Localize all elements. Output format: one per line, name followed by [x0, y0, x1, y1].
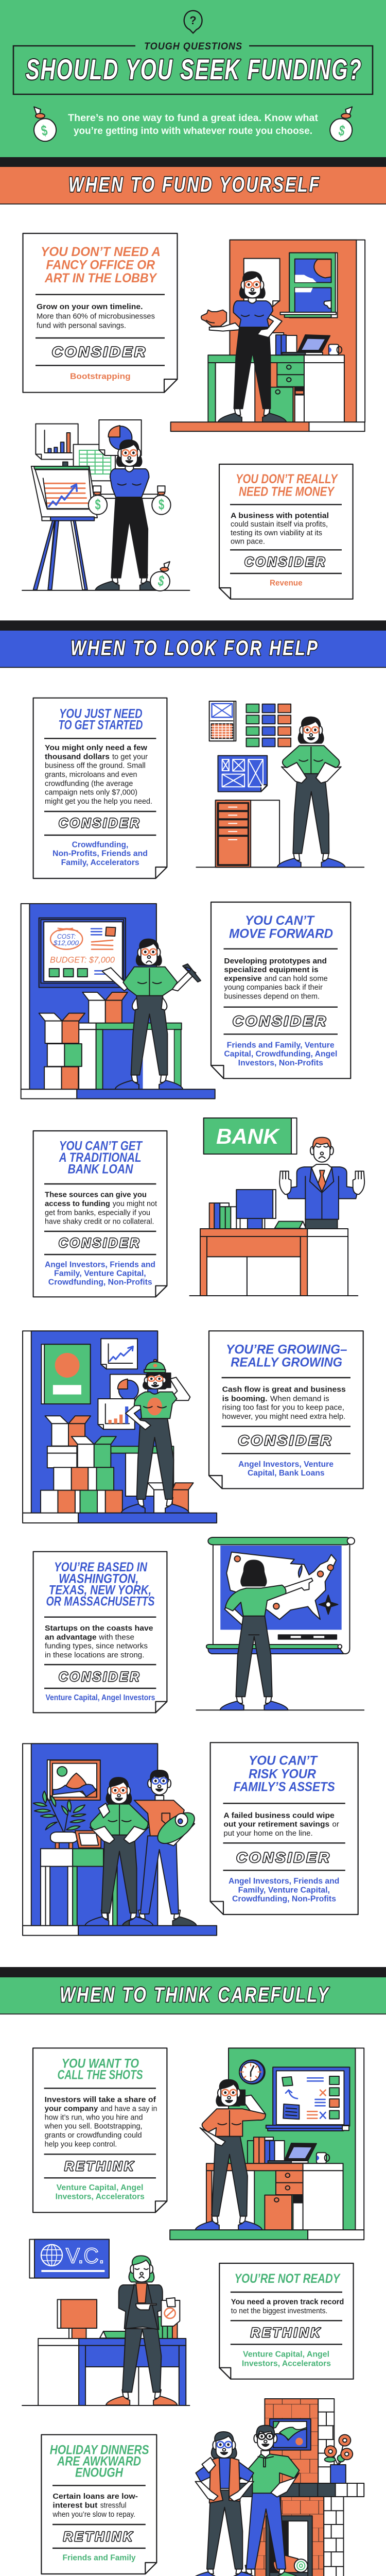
funding sources	[56, 2183, 145, 2201]
V.C. sign	[29, 2240, 109, 2278]
card body text: how it’s run, who you hire and	[45, 2113, 143, 2122]
card heading	[59, 1139, 143, 1176]
card heading	[50, 2443, 149, 2480]
funding sources: Family, Venture Capital,	[238, 1886, 330, 1894]
illustration: woman with charts and money bags: $	[95, 497, 101, 513]
icon: question speech bubble: ?	[189, 14, 197, 27]
filing cabinet	[216, 800, 279, 867]
card body text: expensive	[224, 975, 262, 983]
card body text: specialized equipment is	[224, 966, 319, 974]
icon: money bag left	[34, 107, 56, 141]
stacked boxes	[39, 992, 128, 1089]
table	[79, 1023, 182, 1089]
rethink label: RETHINK	[63, 2530, 134, 2544]
funding sources: Angel Investors, Venture	[238, 1460, 334, 1469]
illustration: woman with blueprints and cabinet	[196, 701, 364, 867]
funding sources: Capital, Bank Loans	[248, 1469, 325, 1478]
card heading	[234, 1754, 335, 1794]
card body text: young companies back if their	[224, 984, 323, 992]
card heading: NEED THE MONEY	[239, 484, 335, 499]
funding sources: Capital, Crowdfunding, Angel	[224, 1050, 337, 1059]
card: you can't move forward	[211, 902, 350, 1078]
card body text: thousand dollars	[45, 753, 110, 761]
funding sources: Angel Investors, Friends and	[229, 1877, 339, 1886]
funding source: Bootstrapping	[70, 372, 131, 381]
funding sources: Angel Investors, Friends and	[45, 1260, 155, 1269]
card body text: business off the ground. Small	[45, 762, 146, 770]
card heading: YOU CAN’T GET	[59, 1139, 143, 1154]
woman with hard hat	[121, 1360, 190, 1513]
card body text: own pace.	[231, 538, 265, 546]
table and boxes	[41, 1416, 194, 1513]
card body text: businesses depend on them.	[224, 992, 320, 1001]
plant and table	[33, 1791, 117, 1926]
card heading	[229, 913, 333, 941]
section banner: when to fund yourself: WHEN TO FUND YOURSELF	[68, 173, 321, 196]
banker	[279, 1138, 364, 1229]
kicker: tough questions: TOUGH QUESTIONS	[144, 41, 242, 52]
funding sources: Non-Profits, Friends and	[52, 850, 148, 858]
card body text	[37, 303, 155, 330]
woman	[102, 939, 201, 1089]
card heading: MOVE FORWARD	[229, 927, 333, 941]
section banner: when to look for help: WHEN TO LOOK FOR HELP	[71, 636, 319, 659]
intro text	[68, 112, 319, 137]
card body text	[222, 1386, 346, 1421]
growth charts	[98, 1338, 148, 1429]
card heading: YOU CAN’T	[249, 1754, 319, 1768]
funding sources: Crowdfunding, Non-Profits	[48, 1278, 152, 1287]
card body text: You need a proven track record	[231, 2298, 344, 2307]
man	[229, 2426, 302, 2576]
card body text: your company	[45, 2105, 98, 2113]
board text: cost and budget: $12,000	[53, 939, 79, 947]
whiteboard	[266, 2067, 349, 2131]
section banner: when to think carefully	[0, 1967, 386, 2014]
card body text: rising too fast for you to keep pace,	[222, 1404, 344, 1412]
card body text: When demand is	[270, 1395, 329, 1403]
funding source: Friends and Family	[63, 2554, 136, 2563]
funding sources: Investors, Accelerators	[56, 2192, 145, 2201]
woman	[85, 1777, 153, 1926]
consider label: CONSIDER	[233, 1013, 328, 1029]
intro text: you’re getting into with whatever route you choose.	[74, 125, 312, 137]
consider label: CONSIDER	[59, 1236, 141, 1250]
funding sources	[52, 840, 148, 867]
woman	[277, 717, 345, 867]
icon: money bag left: $	[40, 122, 49, 140]
consider label: CONSIDER	[59, 1670, 141, 1684]
funding sources: Crowdfunding,	[72, 840, 128, 849]
rethink label: RETHINK	[64, 2159, 135, 2174]
illustration: venture capitalist declining	[22, 2240, 189, 2405]
funding sources: Crowdfunding, Non-Profits	[232, 1895, 336, 1904]
illustration: woman with charts and money bags: $	[156, 573, 166, 590]
card body text: A business with potential	[231, 512, 329, 520]
woman seen from behind	[220, 1560, 313, 1710]
consider label: CONSIDER	[244, 555, 327, 569]
funding sources: Family, Venture Capital,	[54, 1269, 146, 1278]
card: you can't risk your family's assets	[210, 1742, 358, 1914]
desk and monitor	[38, 2299, 186, 2405]
card body text	[52, 2493, 138, 2519]
consider label: CONSIDER	[52, 344, 147, 360]
funding sources: Venture Capital, Angel Investors	[45, 1693, 155, 1702]
card: you're growing, really growing	[209, 1331, 363, 1488]
illustration: couple with baby at home	[23, 1743, 217, 1936]
card body text: when you’re slow to repay.	[52, 2511, 135, 2519]
illustration: woman with piggy bank at desk	[171, 240, 365, 431]
card body text: you might not	[113, 1200, 157, 1208]
card body text	[44, 2096, 157, 2148]
woman in suit	[106, 2256, 180, 2405]
budget whiteboard	[39, 918, 126, 988]
card: you just need to get started	[33, 698, 167, 878]
card heading: YOU DON’T NEED A	[41, 245, 161, 259]
card body text: out your retirement savings	[223, 1821, 329, 1829]
illustration: banker refusing a loan	[189, 1118, 364, 1296]
US map	[226, 1552, 338, 1619]
card body text: and can hold some	[264, 975, 328, 983]
board text: cost and budget: BUDGET: $7,000	[50, 955, 115, 964]
projection screen	[206, 1537, 355, 1654]
card heading: HOLIDAY DINNERS	[50, 2443, 149, 2457]
icon: question speech bubble	[184, 11, 202, 33]
colour swatches	[246, 704, 291, 747]
sign text: BANK: BANK	[216, 1124, 280, 1148]
sign text: V.C.: V.C.	[66, 2244, 104, 2268]
card: holiday dinners are awkward enough	[41, 2435, 156, 2574]
card heading: TEXAS, NEW YORK,	[49, 1583, 151, 1597]
title frame	[13, 46, 373, 94]
card heading	[41, 245, 161, 285]
funding sources	[242, 2350, 331, 2368]
card body text: could sustain itself via profits,	[231, 520, 328, 529]
card heading: FANCY OFFICE OR	[46, 258, 155, 273]
fireplace	[266, 2516, 312, 2576]
bank sign	[204, 1118, 297, 1154]
card heading: YOU CAN’T	[245, 913, 315, 928]
card heading: YOU’RE NOT READY	[235, 2272, 341, 2286]
card heading: FAMILY’S ASSETS	[234, 1780, 335, 1794]
card body text	[45, 744, 152, 806]
card body text: fund with personal savings.	[37, 322, 126, 330]
rethink label: RETHINK	[251, 2326, 322, 2340]
card heading: A TRADITIONAL	[59, 1150, 142, 1165]
card body text: More than 60% of microbusinesses	[37, 312, 155, 320]
illustration: couple by fireplace	[183, 2399, 364, 2576]
card body text: Cash flow is great and business	[222, 1386, 346, 1394]
illustration: woman with charts and money bags: $	[159, 497, 164, 513]
header panel	[0, 0, 386, 157]
money bags	[89, 486, 171, 591]
card heading: TO GET STARTED	[58, 718, 143, 733]
card heading: WASHINGTON,	[59, 1571, 138, 1586]
illustration: woman with budget board and boxes	[21, 904, 215, 1099]
consider label: CONSIDER	[238, 1433, 333, 1448]
card body text: with these	[98, 1633, 134, 1641]
card body text	[224, 957, 328, 1001]
consider label: CONSIDER	[59, 816, 141, 831]
blueprint	[218, 756, 267, 792]
card body text: Startups on the coasts have	[45, 1624, 153, 1633]
card body text: and have a say in	[100, 2105, 157, 2113]
card body text: to get your	[112, 753, 148, 761]
card body text: crowdfunding (the average	[45, 779, 133, 788]
card: you don't really need the money	[219, 464, 353, 599]
card body text: however, you might need extra help.	[222, 1413, 345, 1421]
funding source: Revenue	[270, 579, 303, 588]
icon: money bag right: $	[337, 122, 346, 140]
illustration: woman on phone with growth charts	[23, 1331, 217, 1523]
card body text: You might only need a few	[45, 744, 148, 752]
funding sources	[45, 1260, 155, 1287]
sketchbook	[209, 701, 236, 741]
funding sources: Venture Capital, Angel	[57, 2183, 143, 2192]
card heading: YOU WANT TO	[62, 2056, 139, 2071]
card heading	[58, 2056, 143, 2082]
card heading	[46, 1560, 155, 1608]
card body text: campaign nets only $7,000)	[45, 789, 137, 797]
card body text	[231, 512, 329, 546]
card: you're based in washington, texas, new york or massachusetts	[33, 1552, 167, 1713]
card heading: ENOUGH	[75, 2465, 124, 2480]
card body text: stressful	[100, 2502, 127, 2510]
board text: cost and budget: COST:	[57, 933, 76, 940]
woman	[209, 272, 286, 422]
painting	[270, 2419, 311, 2450]
card body text: Investors will take a share of	[45, 2096, 156, 2104]
card: you can't get a traditional bank loan	[33, 1131, 167, 1297]
funding sources	[229, 1877, 339, 1904]
card body text: to net the biggest investments.	[231, 2307, 327, 2315]
card: you don't need a fancy office	[23, 233, 177, 393]
card heading: OR MASSACHUSETTS	[46, 1594, 155, 1608]
card body text	[223, 1811, 339, 1838]
books and monitor	[209, 1190, 306, 1229]
piggy bank	[201, 310, 226, 326]
card body text: grants, microloans and even	[45, 771, 137, 779]
card body text: A failed business could wipe	[223, 1811, 335, 1820]
card body text: interest but	[52, 2502, 98, 2510]
card body text: Certain loans are low-	[52, 2493, 138, 2501]
illustration: woman on phone in office	[170, 2048, 364, 2240]
charts on wall	[36, 420, 142, 481]
funding sources: Investors, Accelerators	[242, 2360, 331, 2368]
consider label: CONSIDER	[236, 1850, 331, 1865]
funding sources: Family, Accelerators	[61, 858, 139, 867]
funding sources	[238, 1460, 334, 1478]
card heading: YOU’RE BASED IN	[54, 1560, 148, 1574]
section banner: when to fund yourself	[0, 157, 386, 205]
card body text: grants or crowdfunding could	[45, 2131, 142, 2140]
flowers	[325, 2435, 353, 2483]
card body text: an advantage	[45, 1633, 97, 1641]
card body text: access to funding	[45, 1200, 110, 1208]
card body text: Developing prototypes and	[224, 957, 327, 965]
card body text	[45, 1624, 153, 1659]
card heading: RISK YOUR	[249, 1767, 316, 1781]
card body text: testing its own viability at its	[231, 529, 322, 537]
desk	[208, 355, 344, 422]
man holding baby	[122, 1770, 201, 1926]
funding sources	[224, 1041, 337, 1067]
card heading	[226, 1342, 347, 1370]
woman	[195, 2080, 266, 2230]
card body text: in these locations are strong.	[45, 1651, 144, 1659]
card body text: get from banks, especially if you	[45, 1209, 150, 1217]
card body text: or	[332, 1821, 339, 1829]
desk	[206, 2163, 343, 2230]
card body text: These sources can give you	[45, 1191, 147, 1199]
illustration: woman with charts and money bags	[22, 420, 189, 591]
funding sources: Investors, Non-Profits	[238, 1059, 323, 1067]
card body text: is booming.	[222, 1395, 268, 1403]
woman	[191, 2432, 258, 2576]
card heading: YOU’RE GROWING–	[226, 1342, 347, 1357]
card: you're not ready	[219, 2263, 354, 2379]
board text: cost and budget	[50, 933, 115, 964]
card body text: might get you the help you need.	[45, 798, 152, 806]
framed picture	[47, 1760, 100, 1800]
card body text	[45, 1191, 157, 1226]
card body text	[231, 2298, 344, 2315]
card heading: BANK LOAN	[68, 1162, 133, 1176]
card body text: funding types, since networks	[45, 1642, 148, 1651]
card body text: when you sell. Bootstrapping,	[44, 2123, 143, 2131]
card heading: REALLY GROWING	[231, 1355, 342, 1370]
funding sources: Venture Capital, Angel	[243, 2350, 329, 2359]
card body text: put your home on the line.	[223, 1829, 313, 1838]
woman	[95, 440, 164, 590]
card body text: help you keep control.	[45, 2140, 117, 2148]
desk	[189, 1229, 358, 1296]
clock	[239, 2060, 265, 2084]
books laptop mug	[269, 333, 342, 355]
card heading	[236, 472, 338, 499]
illustration: woman pointing at US map	[196, 1537, 364, 1710]
desk items	[248, 2137, 329, 2163]
section banner: when to look for help	[0, 620, 386, 668]
card heading: YOU DON’T REALLY	[236, 472, 338, 486]
card heading: YOU JUST NEED	[59, 706, 143, 721]
window	[280, 253, 338, 318]
card: you want to call the shots	[33, 2048, 167, 2212]
icon: money bag right	[330, 107, 352, 141]
card heading	[58, 706, 143, 733]
flip chart	[31, 462, 97, 590]
funding sources: Friends and Family, Venture	[227, 1041, 335, 1049]
card heading: ART IN THE LOBBY	[44, 271, 157, 285]
card heading: ARE AWKWARD	[57, 2454, 141, 2468]
card body text: Grow on your own timeline.	[37, 303, 143, 311]
intro text: There’s no one way to fund a great idea. Know what	[68, 112, 319, 124]
wall poster	[41, 1344, 91, 1404]
card heading: CALL THE SHOTS	[58, 2068, 143, 2082]
brick chimney	[238, 2399, 364, 2576]
card body text: have shaky credit or no collateral.	[45, 1218, 154, 1226]
